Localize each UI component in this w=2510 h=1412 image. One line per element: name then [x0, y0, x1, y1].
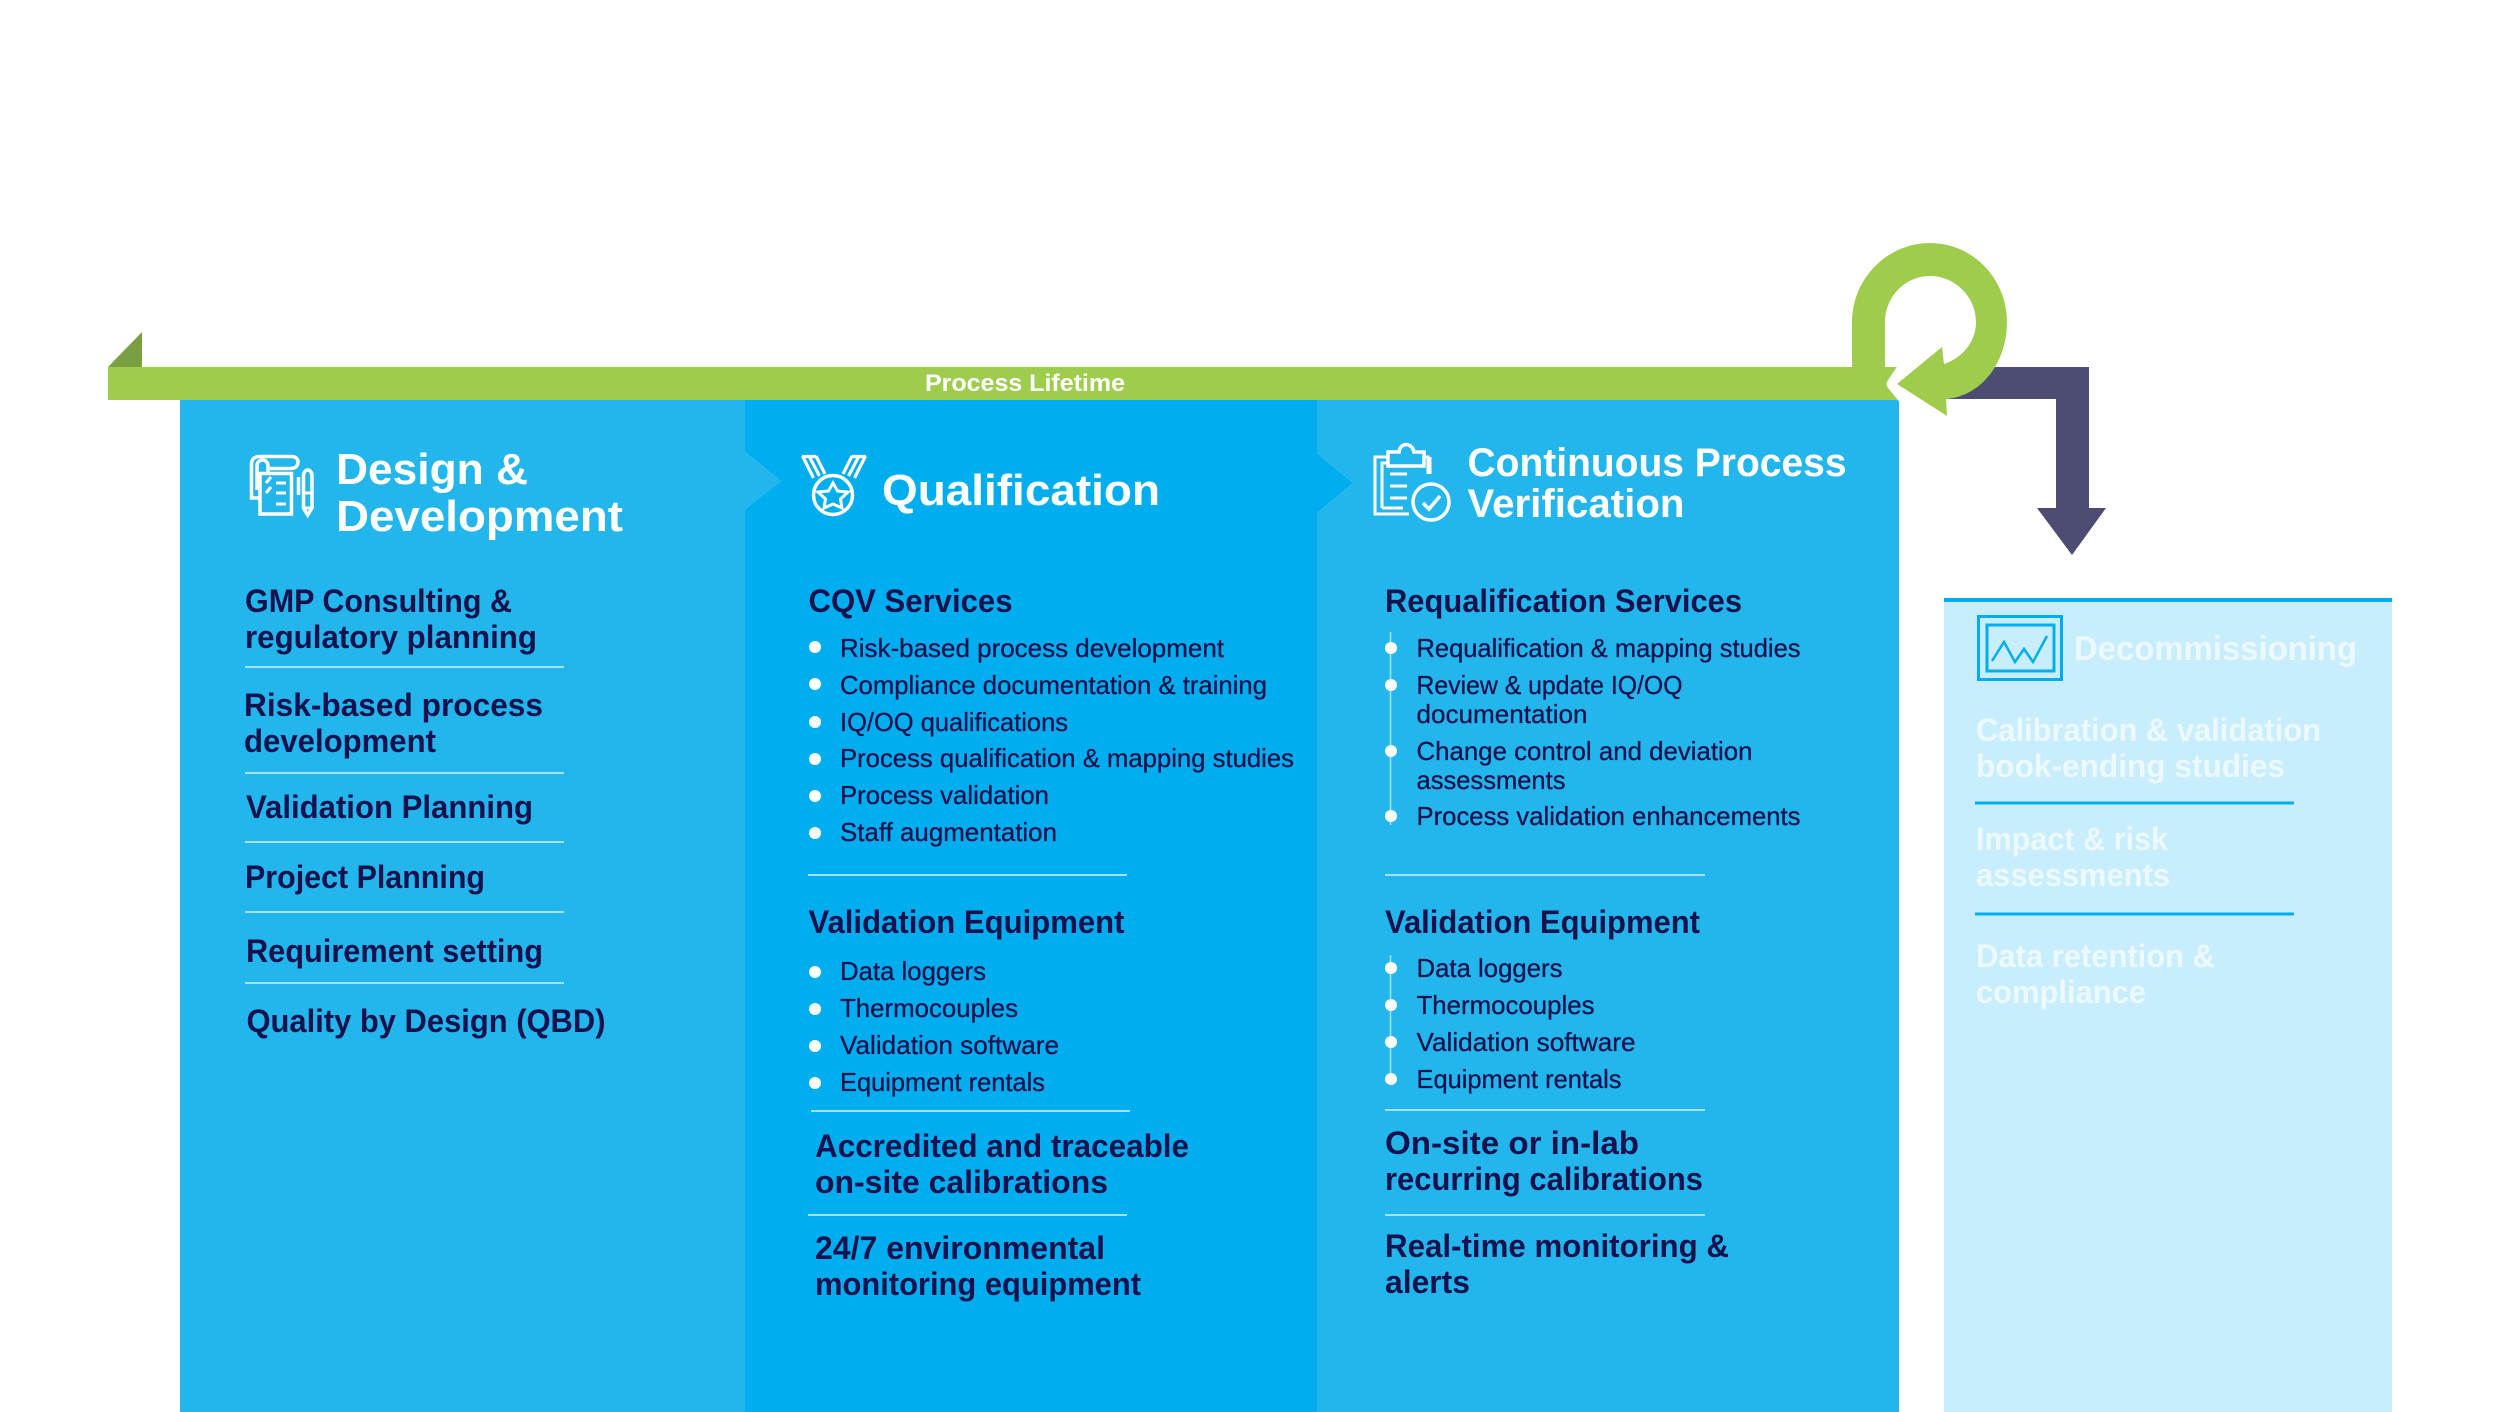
- list: validation equipment: Validation Equipment: [808, 904, 1125, 940]
- list: requalification services: Requalification & mapping studies: [1416, 633, 1800, 663]
- panel: decommissioning: [1944, 598, 2392, 1412]
- list: validation equipment: [808, 904, 1125, 1097]
- item: risk-based process development: [244, 687, 543, 759]
- item: accredited calibrations: on-site calibrations: [815, 1164, 1108, 1200]
- item: risk-based process development: development: [244, 723, 436, 759]
- item: on-site calibrations: [1385, 1125, 1703, 1197]
- heading: design and development: Design &: [336, 445, 528, 494]
- heading: qualification: Qualification: [882, 466, 1160, 515]
- list: CQV services: Process validation: [840, 780, 1049, 810]
- list: validation equipment: Equipment rentals: [1416, 1064, 1622, 1094]
- list: validation equipment: Thermocouples: [840, 993, 1018, 1023]
- arrow: continuous loop: [1852, 243, 2007, 416]
- list: CQV services: IQ/OQ qualifications: [840, 707, 1068, 737]
- item: data retention: compliance: [1976, 974, 2146, 1010]
- item: impact and risk: [1976, 821, 2170, 893]
- icon: medal: [802, 456, 866, 514]
- icon: clipboard with check: [1375, 444, 1449, 520]
- list: requalification services: Process validation enhancements: [1416, 801, 1800, 831]
- arrow: decommissioning transition: [1940, 367, 2106, 555]
- list: validation equipment: Equipment rentals: [840, 1067, 1045, 1097]
- item: GMP consulting: [245, 583, 537, 655]
- icon: chart monitor: [1978, 616, 2062, 680]
- item: data retention: Data retention &: [1976, 938, 2215, 974]
- list: CQV services: Process qualification & mapping studies: [840, 743, 1294, 773]
- item: validation planning: Validation Planning: [246, 789, 533, 825]
- item: on-site calibrations: recurring calibrations: [1385, 1161, 1703, 1197]
- heading: continuous process verification: Continuous Process: [1468, 441, 1846, 485]
- list: validation equipment: Data loggers: [1416, 953, 1562, 983]
- item: real-time monitoring: [1385, 1228, 1729, 1300]
- item: impact and risk: assessments: [1976, 857, 2170, 893]
- panel: qualification: [745, 400, 1353, 1412]
- item: accredited calibrations: [815, 1128, 1189, 1200]
- item: real-time monitoring: Real-time monitoring &: [1385, 1228, 1729, 1264]
- list: requalification services: Change control and deviation: [1416, 736, 1752, 766]
- item: calibration and validation: Calibration & validation: [1976, 712, 2321, 748]
- arrow: process lifetime bar: [108, 332, 1902, 400]
- list: requalification services: documentation: [1416, 699, 1588, 729]
- list: requalification services: assessments: [1416, 765, 1566, 795]
- heading: continuous process verification: Verification: [1468, 482, 1684, 526]
- list: requalification services: Requalification Services: [1385, 583, 1742, 619]
- heading: design and development: Development: [336, 492, 623, 541]
- list: CQV services: Compliance documentation & training: [840, 670, 1267, 700]
- item: requirement setting: Requirement setting: [246, 933, 543, 969]
- heading: continuous process verification: [1468, 441, 1846, 526]
- item: accredited calibrations: Accredited and traceable: [815, 1128, 1189, 1164]
- list: validation equipment: Thermocouples: [1416, 990, 1594, 1020]
- list: requalification services: [1385, 583, 1800, 831]
- list: CQV services: Staff augmentation: [840, 817, 1057, 847]
- label: process lifetime: Process Lifetime: [925, 370, 1125, 397]
- item: on-site calibrations: On-site or in-lab: [1385, 1125, 1639, 1161]
- list: CQV services: CQV Services: [808, 583, 1012, 619]
- item: project planning: Project Planning: [245, 859, 485, 895]
- item: GMP consulting: GMP Consulting &: [245, 583, 512, 619]
- item: calibration and validation: book-ending studies: [1976, 748, 2285, 784]
- panel: design and development: [180, 400, 781, 1412]
- item: environmental monitoring: [815, 1230, 1141, 1302]
- panel: continuous process verification: [1317, 400, 1899, 1412]
- item: calibration and validation: [1976, 712, 2321, 784]
- list: requalification services: Review & update IQ/OQ: [1416, 670, 1682, 700]
- list: validation equipment: Validation software: [840, 1030, 1059, 1060]
- heading: design and development: [336, 445, 623, 541]
- item: impact and risk: Impact & risk: [1976, 821, 2168, 857]
- item: environmental monitoring: 24/7 environmental: [815, 1230, 1105, 1266]
- list: validation equipment: [1385, 904, 1700, 1094]
- item: quality by design: Quality by Design (QBD): [246, 1003, 606, 1039]
- item: real-time monitoring: alerts: [1385, 1264, 1470, 1300]
- item: data retention: [1976, 938, 2215, 1010]
- item: environmental monitoring: monitoring equipment: [815, 1266, 1141, 1302]
- list: validation equipment: Validation software: [1416, 1027, 1636, 1057]
- list: validation equipment: Validation Equipment: [1385, 904, 1700, 940]
- icon: notepad and pen: [252, 456, 312, 515]
- item: GMP consulting: regulatory planning: [245, 619, 537, 655]
- list: CQV services: [808, 583, 1294, 847]
- item: risk-based process development: Risk-based process: [244, 687, 543, 723]
- heading: decommissioning: Decommissioning: [2074, 630, 2357, 668]
- list: validation equipment: Data loggers: [840, 956, 986, 986]
- list: CQV services: Risk-based process development: [840, 633, 1225, 663]
